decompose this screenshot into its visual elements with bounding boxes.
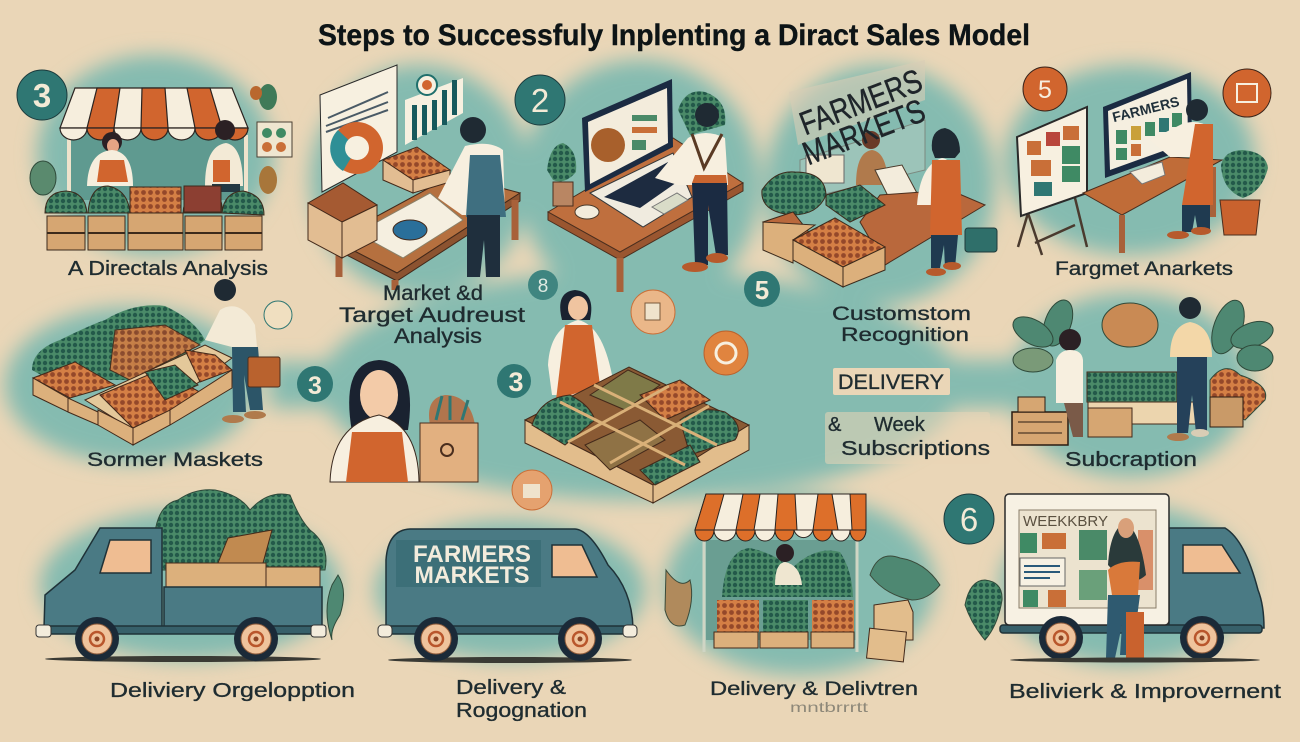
foliage bbox=[32, 305, 205, 380]
stall interior bbox=[704, 540, 857, 652]
truck box bbox=[1005, 494, 1169, 625]
crates bbox=[1012, 397, 1243, 445]
caption: customer recognition: Customstom bbox=[832, 304, 971, 325]
desk bbox=[333, 175, 520, 290]
panel: delivery van bbox=[378, 529, 637, 722]
side plants bbox=[665, 556, 940, 626]
monitor: FARMERS bbox=[1111, 93, 1181, 125]
table bbox=[860, 190, 985, 265]
panel: market analysis bbox=[308, 65, 525, 348]
caption: Delivery & bbox=[456, 677, 567, 699]
man bbox=[1167, 297, 1212, 441]
number badge 3 left: 3 bbox=[308, 372, 322, 400]
caption: delivery weekly subscriptions: Subscriptions bbox=[841, 438, 990, 460]
awning bbox=[695, 494, 866, 541]
cargo foliage bbox=[154, 490, 344, 640]
hanging produce card bbox=[257, 122, 292, 157]
number badge 3: 3 bbox=[508, 367, 524, 397]
ground shadow bbox=[45, 656, 321, 662]
couple bbox=[1106, 518, 1146, 658]
report board bbox=[320, 65, 397, 192]
caption: Delivery & Delivtren bbox=[710, 679, 918, 700]
truck poster bbox=[1019, 510, 1156, 608]
caption: Subcraption bbox=[1065, 449, 1197, 471]
sign: FARMERS bbox=[794, 62, 927, 142]
caption: customer recognition: Recognition bbox=[841, 325, 969, 346]
sign bbox=[789, 60, 930, 172]
woman bbox=[1056, 329, 1083, 437]
number badge 6 bbox=[944, 494, 994, 544]
ground shadow bbox=[1010, 658, 1260, 662]
produce boxes bbox=[308, 147, 450, 258]
wheels bbox=[1039, 616, 1224, 660]
number badge 5 bbox=[744, 271, 780, 307]
cargo crates bbox=[166, 530, 320, 587]
panel: online store laptop bbox=[515, 75, 743, 292]
crates of produce bbox=[45, 186, 264, 250]
number badge 5 bbox=[1023, 67, 1067, 111]
small badge bbox=[264, 301, 292, 329]
number badge 2 bbox=[515, 75, 565, 125]
bumpers bbox=[378, 625, 637, 637]
number badge 2: 2 bbox=[531, 82, 549, 119]
vendors bbox=[87, 120, 243, 192]
panel: box truck bbox=[944, 494, 1282, 703]
caption: Deliviery Orgelopption bbox=[110, 680, 355, 702]
panel: subscription garden bbox=[1008, 296, 1277, 471]
number badge 3 left bbox=[297, 366, 333, 402]
number badge 5: 5 bbox=[1038, 76, 1052, 104]
number badge 3: 3 bbox=[33, 77, 51, 114]
stall backdrop and poles bbox=[69, 130, 246, 200]
number badge 3 bbox=[497, 364, 531, 398]
sign: MARKETS bbox=[797, 92, 930, 172]
person bbox=[438, 117, 506, 277]
caption: delivery weekly subscriptions: DELIVERY bbox=[838, 371, 944, 394]
faded caption: mntbrrrtt bbox=[790, 699, 868, 715]
plants and crates bbox=[762, 172, 885, 287]
caption: Market &d bbox=[383, 282, 483, 305]
bumpers bbox=[36, 625, 326, 637]
parcels bbox=[867, 600, 913, 662]
person bbox=[1150, 99, 1213, 239]
van label: FARMERS bbox=[413, 541, 531, 568]
plants bbox=[1008, 296, 1277, 420]
clipboard bbox=[875, 165, 918, 204]
panel: stall bbox=[665, 494, 940, 715]
wheels bbox=[414, 617, 602, 661]
caption: delivery weekly subscriptions bbox=[825, 368, 990, 464]
caption: A Directals Analysis bbox=[68, 258, 268, 280]
icon badges: 8 bbox=[538, 276, 548, 297]
caption: Rogognation bbox=[456, 700, 587, 722]
caption: delivery weekly subscriptions: & bbox=[828, 414, 842, 436]
foliage bed bbox=[1087, 372, 1200, 437]
icon badge bbox=[1223, 69, 1271, 117]
number badge 3 bbox=[17, 70, 67, 120]
number badge 5: 5 bbox=[755, 275, 769, 305]
panel: monitor and board bbox=[1017, 67, 1271, 280]
plant bbox=[965, 580, 1002, 640]
monitor bbox=[1103, 72, 1192, 184]
truck body bbox=[40, 528, 322, 634]
truck cab bbox=[1000, 528, 1264, 633]
vendor bbox=[548, 290, 612, 400]
shopping bag bbox=[420, 395, 478, 482]
panel: market stall bbox=[17, 70, 292, 280]
ground shadow bbox=[388, 657, 632, 663]
side plants bbox=[30, 84, 277, 195]
desk plant bbox=[547, 143, 599, 219]
panel: central produce tray bbox=[497, 270, 780, 510]
easel legs bbox=[1018, 198, 1087, 255]
laptop bbox=[582, 79, 692, 227]
tray bbox=[525, 367, 749, 503]
panel: farmers markets sign bbox=[762, 60, 997, 287]
desk bbox=[1083, 157, 1222, 253]
van body bbox=[383, 529, 633, 634]
bar chart board bbox=[405, 75, 463, 145]
woman bbox=[330, 360, 419, 482]
booth bbox=[800, 120, 925, 200]
panel: pickup truck bbox=[36, 490, 355, 702]
caption: Target Audreust bbox=[339, 304, 525, 327]
board bbox=[1017, 107, 1087, 216]
number badge 6: 6 bbox=[960, 501, 978, 538]
caption: delivery weekly subscriptions: Week bbox=[874, 414, 926, 436]
icon badges bbox=[512, 270, 748, 510]
caption: Analysis bbox=[394, 325, 482, 348]
panel: shopper with crates bbox=[32, 279, 292, 471]
potted plant bbox=[1220, 150, 1268, 235]
truck poster: WEEKKBRY bbox=[1023, 513, 1108, 530]
title: Steps to Successfuly Inplenting a Diract Sales Model bbox=[318, 19, 1030, 52]
van label: MARKETS bbox=[414, 562, 530, 589]
person bbox=[917, 128, 962, 276]
panel: vendor with bag bbox=[330, 360, 478, 482]
stall awning bbox=[60, 88, 248, 140]
wheels bbox=[75, 617, 278, 661]
caption: Belivierk & Improvernent bbox=[1009, 681, 1282, 703]
shopper bbox=[205, 279, 280, 423]
basket bbox=[965, 228, 997, 252]
person bbox=[655, 91, 728, 272]
desk bbox=[548, 138, 743, 292]
crates bbox=[33, 325, 232, 445]
caption: Sormer Maskets bbox=[87, 450, 263, 471]
caption: Fargmet Anarkets bbox=[1055, 259, 1233, 280]
